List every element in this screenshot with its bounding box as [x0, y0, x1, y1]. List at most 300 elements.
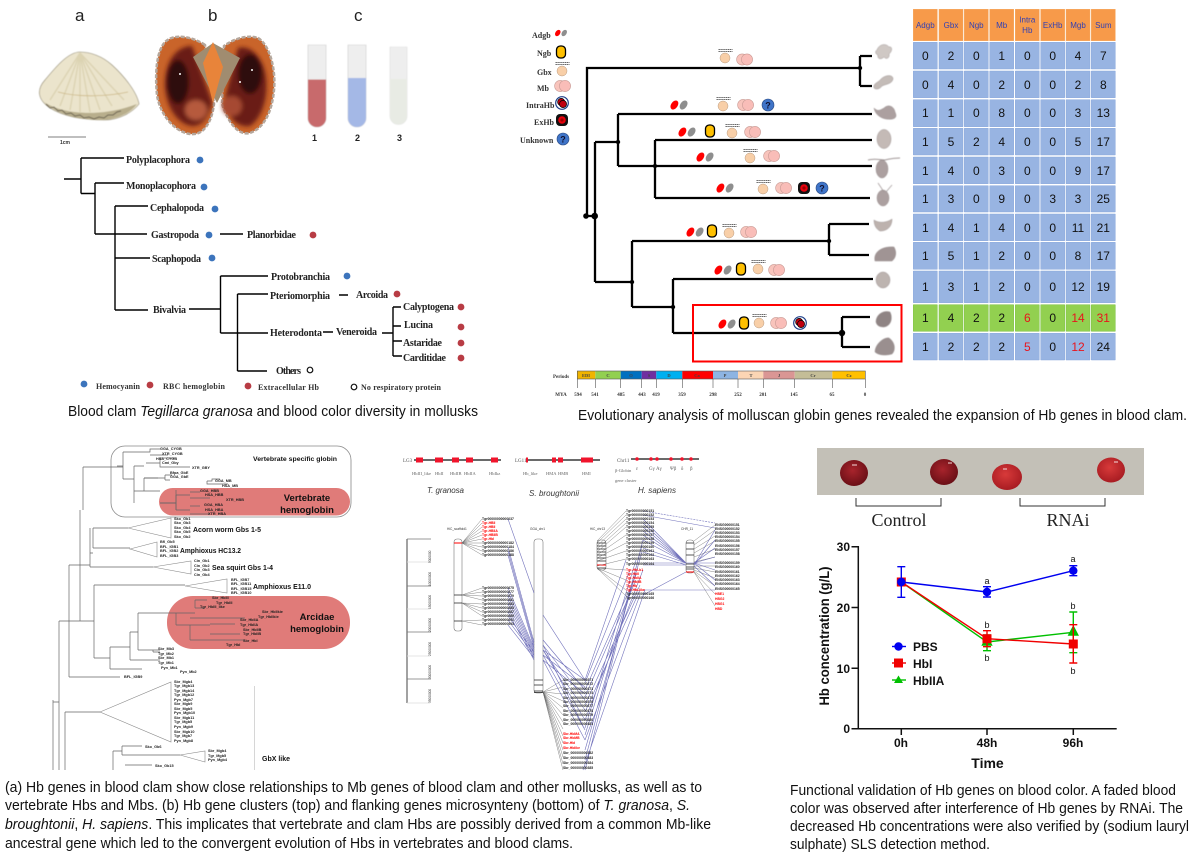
leaf labels: Cin_Gb1 [194, 559, 210, 563]
tube numbers [312, 133, 402, 143]
label: control: Control [871, 510, 927, 530]
gene count table: 0 [1024, 106, 1031, 120]
gene labels column 2: Sbr_000000000379 [563, 713, 593, 717]
gene labels column 2: Sbr_000000000373 [563, 687, 593, 691]
gene count table: 0 [973, 78, 980, 92]
gene count table: 31 [1097, 311, 1110, 325]
gene count table: 11 [1072, 221, 1085, 235]
significance letters: b [1070, 666, 1076, 676]
gene count table: 2 [998, 249, 1005, 263]
chart legend: HbIIA [913, 674, 945, 688]
gene labels column 2: Sbr_000000000383 [563, 756, 593, 760]
caption E: Functional validation of Hb genes on blood color. A faded blood [790, 782, 1176, 799]
gene count table: 2 [998, 311, 1005, 325]
leaf labels: Pyn_Mb1 [161, 666, 178, 670]
photo: tubes [308, 45, 407, 127]
species names: S. broughtonii [529, 489, 579, 498]
leaf labels: Tgr_HbIIB [243, 632, 261, 636]
geologic timeline: EDI [582, 373, 590, 378]
leaf labels: HSA_CYGB [156, 457, 177, 461]
leaf labels: Bfpa_GbE [170, 471, 189, 475]
gene count table: Adgb [916, 21, 935, 30]
leaf labels: GGA_HBA [204, 503, 223, 507]
leaf labels: BFL_IGB7 [231, 578, 249, 582]
leaf labels: GGA_GbE [170, 475, 189, 479]
panel: gene clusters and microsynteny: HiC_scaffold1 [447, 527, 467, 531]
gene labels column 1: Tgr-HbI [482, 537, 494, 541]
vertebrate specific box [111, 446, 351, 517]
gene count table: 0 [1024, 249, 1031, 263]
chart legend [892, 640, 945, 688]
gene count table: 4 [948, 221, 955, 235]
leaf labels: Cin_Gb3 [194, 568, 210, 572]
gene count table: 0 [973, 192, 980, 206]
leaf labels: BFL_IGB1 [160, 545, 178, 549]
gene labels column 3: Tgr000000000156 [626, 529, 654, 533]
species names [427, 486, 676, 498]
gene count table: 7 [1100, 49, 1107, 63]
gene count table: 2 [973, 135, 980, 149]
caption C [5, 779, 711, 852]
leaf labels: Sbr_Mb1 [158, 656, 174, 660]
gene legend icons [554, 29, 571, 145]
gene count table: 2 [1075, 78, 1082, 92]
gene legend labels: Mb [537, 84, 550, 93]
axis labels: 96h [1063, 736, 1083, 750]
gene count table: 2 [973, 340, 980, 354]
gene count table: 0 [1024, 221, 1031, 235]
gene count table: Mgb [1070, 21, 1086, 30]
gene labels column 2: Sbr-HbI [563, 741, 575, 745]
tree taxon labels: Protobranchia [271, 272, 330, 283]
leaf labels: Sbr_Mgb10 [174, 730, 194, 734]
geologic timeline: 594 [574, 393, 582, 398]
leaf labels: Sko_Gb15 [155, 764, 174, 768]
legend [96, 382, 442, 392]
caption E [790, 782, 1189, 853]
clade labels: Amphioxus HC13.2 [180, 548, 241, 555]
gene count table: 4 [948, 78, 955, 92]
H. sapiens gene cluster: Aγ [656, 467, 663, 472]
gene count table: 0 [1049, 135, 1056, 149]
gene labels column 2: Sbr_000000000385 [563, 766, 593, 770]
gene labels column 3: Tgr-HbIIA [626, 576, 642, 580]
tree taxon labels: Polyplacophora [126, 155, 190, 166]
gene labels column 4: ENSG00000159 [715, 561, 740, 565]
gene count table: Ngb [969, 21, 984, 30]
gene labels column 4: HBD [715, 607, 723, 611]
gene count table: 8 [1075, 249, 1082, 263]
panel: blood clam photos and mollusk tree [39, 6, 478, 420]
megabase scale: 15000000 [428, 595, 432, 609]
gene labels column 2: Sbr_000000000371 [563, 678, 593, 682]
photo: opened clam [156, 37, 274, 134]
leaf labels: HSA_HBB [205, 493, 224, 497]
gene count table: 0 [1024, 192, 1031, 206]
gene count table: 3 [948, 192, 955, 206]
gene count table: 8 [1100, 78, 1107, 92]
tree branches [53, 449, 245, 770]
scale bar [48, 137, 86, 146]
label a: a [75, 6, 85, 25]
chromosome to label fans [462, 511, 715, 770]
T. granosa gene cluster: HbIII_like [412, 471, 431, 476]
leaf labels: Sbr_Mgb4 [208, 749, 227, 753]
leaf labels: BFL_IGB3 [160, 554, 178, 558]
leaf labels: Sko_Gb1 [174, 517, 190, 521]
gene count table: 24 [1097, 340, 1110, 354]
gene count table: 14 [1071, 311, 1085, 325]
leaf labels: Pyn_Mgb10 [174, 711, 195, 715]
gene count table: 3 [948, 280, 955, 294]
tree taxon labels: Monoplacophora [126, 181, 196, 192]
geologic timeline: J [778, 373, 781, 378]
leaf labels: Sbr_Mgb4 [174, 680, 193, 684]
caption C: vertebrate Hbs and Mbs. (b) Hb gene clusters (top) and flanking genes microsynteny (bottom) of T. granosa, S. [5, 797, 690, 814]
tree taxon labels: Heterodonta [270, 328, 322, 339]
legend: No respiratory protein [361, 383, 442, 392]
tree taxon labels: Scaphopoda [152, 254, 201, 265]
gene count table: 13 [1097, 106, 1110, 120]
gene count table: 1 [922, 340, 929, 354]
geologic timeline: 359 [678, 393, 686, 398]
leaf labels: Sko_Gb2 [174, 535, 190, 539]
leaf labels: XTR_HBA [208, 512, 226, 516]
caption E: sulphate) SLS detection method. [790, 836, 990, 853]
geologic timeline: 485 [617, 393, 625, 398]
megabase scale: 10000000 [428, 572, 432, 586]
leaf labels: Tgr_Mb2 [158, 652, 174, 656]
gene labels column 4: ENSG00000154 [715, 535, 740, 539]
S. broughtonii gene cluster: Hb_like [523, 471, 538, 476]
tree taxon labels: Astaridae [403, 338, 443, 349]
gene count table: 1 [922, 249, 929, 263]
gene count table: Hb [1022, 26, 1033, 35]
gene count table: 0 [973, 49, 980, 63]
gene labels column 4: ENSG00000162 [715, 574, 740, 578]
gene labels column 2: Sbr-HbMB [563, 736, 580, 740]
clade labels: Sea squirt Gbs 1-4 [212, 565, 273, 572]
gene count table: 5 [948, 249, 955, 263]
species names: T. granosa [427, 486, 465, 495]
panel: RNAi validation [790, 448, 1189, 853]
chart legend: HbI [913, 657, 932, 671]
gene labels column 4: ENSG00000165 [715, 587, 740, 591]
leaf labels: Pyn_Mgb9 [174, 725, 193, 729]
tree taxon labels: Carditidae [403, 353, 447, 364]
caption C: (a) Hb genes in blood clam show close relationships to Mb genes of blood clam and other mollusks, as well as to [5, 779, 702, 796]
tree taxon labels: Cephalopoda [150, 203, 204, 214]
gene legend labels [520, 31, 555, 145]
tree taxon labels [126, 155, 454, 377]
gene count table: 2 [973, 311, 980, 325]
gene count table: 2 [948, 340, 955, 354]
leaf labels: Sbr_Mgb5 [174, 707, 192, 711]
gene labels column 3: Tgr000000000165 [626, 592, 654, 596]
gene count table: 1 [922, 135, 929, 149]
gene labels column 3: Tgr000000000166 [626, 596, 654, 600]
gene labels column 2: Sbr_000000000384 [563, 761, 593, 765]
gene labels column 1: Tgr00000000000186 [482, 549, 514, 553]
axes [852, 547, 1117, 735]
gene count table: 0 [1024, 280, 1031, 294]
leaf labels: GGA_HBB [200, 489, 219, 493]
gene labels column 4: HBG1 [715, 602, 725, 606]
H. sapiens gene cluster: Chr11 [617, 459, 630, 464]
gene count table: 17 [1097, 135, 1110, 149]
S. broughtonii gene cluster [515, 458, 600, 476]
axis labels: 30 [837, 540, 850, 554]
gene legend labels: Gbx [537, 68, 552, 77]
gene count table: 1 [973, 221, 980, 235]
gene labels column 4: ENSG00000153 [715, 531, 740, 535]
megabase scale: 30000000 [428, 665, 432, 679]
leaf labels [124, 447, 283, 768]
leaf labels: GGA_CYGB [160, 447, 182, 451]
gene count table: 0 [922, 78, 929, 92]
axis labels: Time [971, 755, 1004, 771]
leaf labels: Pyn_Mgb4 [208, 758, 228, 762]
significance letters: a [1070, 554, 1076, 564]
leaf labels: BFL_IGB9 [124, 675, 142, 679]
leaf labels: XTR_HBB [226, 498, 244, 502]
gene count table: 0 [1049, 311, 1056, 325]
gene labels column 3: Tgr000000000153 [626, 517, 654, 521]
gene labels column 2: Sbr-HbMA [563, 732, 580, 736]
gene labels column 3: Tgr-Hb [626, 584, 637, 588]
gene labels column 4 [715, 523, 740, 611]
gene count table: 0 [1049, 249, 1056, 263]
significance letters [984, 554, 1076, 676]
scale bar: 1cm [60, 140, 71, 146]
gene labels column 3: Tgr-HbIIB [626, 580, 642, 584]
gene count table: Mb [996, 21, 1008, 30]
leaf labels: Tgr_HbIII_like [200, 605, 225, 609]
tube numbers: 1 [312, 133, 317, 143]
H. sapiens gene cluster [615, 457, 699, 483]
gene count table: 2 [998, 78, 1005, 92]
gene count table: 1 [922, 106, 929, 120]
gene count table: 2 [998, 280, 1005, 294]
gene labels column 4: ENSG00000161 [715, 570, 740, 574]
gene labels column 1: Tgr00000000000675 [482, 586, 514, 590]
gene count table: 6 [1024, 311, 1031, 325]
series: HbI [897, 578, 1078, 663]
clade labels: Vertebrate [284, 493, 330, 504]
megabase scale: 5000000 [428, 550, 432, 563]
gene labels column 1: Tgr00000000000182 [482, 541, 514, 545]
megabase scale: 20000000 [428, 618, 432, 632]
leaf labels: Sbr_HbIII [212, 596, 229, 600]
gene labels column 3: Tgr000000000162 [626, 553, 654, 557]
chromosome bars [454, 539, 694, 693]
gene labels column 1: Tgr00000000000679 [482, 594, 514, 598]
gene icons on branches [669, 50, 828, 330]
geologic timeline: 201 [759, 393, 767, 398]
megabase scale: 25000000 [428, 642, 432, 656]
T. granosa gene cluster: LG3 [403, 459, 413, 464]
species names: H. sapiens [638, 486, 676, 495]
gene labels column 1: Tgr-HBIIB [482, 533, 498, 537]
gene count table: 0 [1049, 340, 1056, 354]
leaf labels: Tgr_Mgb14 [174, 689, 195, 693]
tree taxon labels: Lucina [404, 320, 433, 331]
geologic timeline: 443 [638, 393, 646, 398]
geologic timeline: C [606, 373, 610, 378]
gene labels column 3: Tgr000000000157 [626, 533, 654, 537]
clade labels: Arcidae [300, 612, 334, 623]
gene count table: 0 [922, 49, 929, 63]
gene labels column 2: Sbr_000000000377 [563, 704, 593, 708]
leaf labels: Pyn_Mgb7 [174, 698, 193, 702]
gene count table: 1 [922, 280, 929, 294]
clade labels: Acorn worm Gbs 1-5 [193, 527, 261, 534]
leaf labels: XTR_GBY [192, 466, 210, 470]
gene count table: 3 [1075, 192, 1082, 206]
gene count table: 9 [998, 192, 1005, 206]
gene labels column 4: ENSG00000152 [715, 527, 740, 531]
geologic timeline: 65 [830, 393, 835, 398]
gene labels column 2: Sbr_000000000382 [563, 751, 593, 755]
gene labels column 1: Tgr00000000000685 [482, 606, 514, 610]
T. granosa gene cluster: HbIIB [450, 471, 462, 476]
leaf labels: Sbr_HbIIkie [262, 610, 283, 614]
T. granosa gene cluster: HbII [435, 471, 444, 476]
geologic timeline: P [724, 373, 727, 378]
axis labels: 0 [843, 722, 850, 736]
megabase scale [407, 539, 432, 703]
photo: blood samples [817, 448, 1144, 495]
gene labels column 2 [563, 678, 593, 770]
gene count table: 1 [922, 311, 929, 325]
leaf labels: Tgr_HbI [226, 643, 240, 647]
gene labels column 1: Tgr-HBIIA [482, 529, 498, 533]
gene labels column 1: Tgr00000000000681 [482, 598, 514, 602]
S. broughtonii gene cluster: HMI [582, 471, 591, 476]
photo: clam shell [39, 52, 139, 120]
gene labels column 4: HBE1 [715, 592, 724, 596]
gene labels column 1: Tgr00000000000188 [482, 553, 514, 557]
leaf labels: Tgr_Mgb7 [174, 734, 192, 738]
gene count table: 0 [973, 164, 980, 178]
leaf labels: BFL_IGB2 [160, 549, 178, 553]
gene labels column 2: Sbr_000000000381 [563, 722, 593, 726]
gene labels column 3: Tgr-HbI-like [626, 588, 645, 592]
gene count table: 5 [1024, 340, 1031, 354]
leaf labels: Sko_Gb6 [145, 745, 161, 749]
clade labels: hemoglobin [290, 624, 344, 635]
tree taxon labels: Arcoida [356, 290, 388, 301]
gene legend labels: Unknown [520, 136, 554, 145]
gene labels column 2: Sbr_000000000378 [563, 709, 593, 713]
leaf labels: HSA_HBA [205, 508, 224, 512]
collapsed clades [100, 518, 227, 762]
gene labels column 1: Tgr00000000000689 [482, 614, 514, 618]
arcidae hemoglobin highlight [167, 596, 350, 649]
gene labels column 1: Tgr00000000000693 [482, 622, 514, 626]
gene count table [913, 9, 1115, 360]
gene count table: 12 [1071, 280, 1085, 294]
tube numbers: 2 [355, 133, 360, 143]
H. sapiens gene cluster: Ψβ [670, 467, 677, 472]
leaf labels: Tgr_HbIII [216, 601, 232, 605]
H. sapiens gene cluster: δ [681, 467, 684, 472]
geologic timeline: 145 [790, 393, 798, 398]
gene count table: 4 [998, 221, 1005, 235]
leaf labels: Sbr_HbI [243, 639, 258, 643]
gene count table: 3 [1075, 106, 1082, 120]
panel: gene clusters and microsynteny [403, 457, 740, 770]
geologic timeline [553, 371, 867, 398]
leaf labels: Sko_Gb4 [174, 526, 191, 530]
synteny links [508, 511, 715, 770]
caption A: Blood clam Tegillarca granosa and blood color diversity in mollusks [68, 403, 478, 420]
gene labels column 1: Tgr-HBII [482, 521, 495, 525]
H. sapiens gene cluster: β [690, 467, 693, 472]
leaf labels: BFL_IGB11 [231, 582, 251, 586]
gene count table: 19 [1097, 280, 1110, 294]
gene labels column 4: ENSG00000160 [715, 565, 740, 569]
leaf labels: Sbr_Mb3 [158, 647, 174, 651]
gene count table: 0 [1049, 78, 1056, 92]
gene count table: 0 [1024, 78, 1031, 92]
leaf labels: Pyn_Mgb8 [174, 739, 193, 743]
clade labels [180, 456, 344, 763]
gene labels column 2: Sbr-Hblike [563, 746, 580, 750]
leaf labels: Sbr_Mgb11 [174, 716, 194, 720]
species silhouettes [868, 45, 900, 355]
S. broughtonii gene cluster: LG11 [515, 459, 527, 464]
tree taxon labels: Planorbidae [247, 230, 297, 241]
mollusk phylogeny tree [64, 158, 402, 371]
gene labels column 1: Tgr00000000000687 [482, 610, 514, 614]
T. granosa gene cluster [403, 458, 501, 476]
leaf labels: HSA_MB [222, 484, 238, 488]
leaf labels: Cin_Gb4 [194, 573, 211, 577]
gene count table: 0 [973, 106, 980, 120]
leaf labels: Pyn_Mb2 [180, 670, 197, 674]
gene count table: Intra [1019, 16, 1036, 24]
axis labels: 48h [977, 736, 997, 750]
leaf labels: Sbr_HbIIA [240, 618, 259, 622]
leaf labels: BFL_IGB10 [231, 591, 251, 595]
gene count table: 0 [1049, 280, 1056, 294]
tube numbers: 3 [397, 133, 402, 143]
tree taxon labels: Pteriomorphia [270, 291, 330, 302]
gene labels column 2: Sbr_000000000374 [563, 691, 593, 695]
gene count table: 1 [922, 221, 929, 235]
axis labels: 10 [837, 662, 850, 676]
leaf labels: Cmi_Gby [162, 461, 180, 465]
gene labels column 3: Tgr000000000161 [626, 549, 654, 553]
gene count table: 5 [948, 135, 955, 149]
geologic timeline: 419 [652, 393, 660, 398]
leaf labels: Tgr_Mb1 [158, 661, 174, 665]
gene count table: 3 [1049, 192, 1056, 206]
geologic timeline: MYA [555, 393, 567, 398]
bracket: RNAi [1020, 498, 1105, 506]
leaf labels: Tgr_Mgb5 [208, 754, 226, 758]
significance letters: b [984, 653, 990, 663]
gene count table: 0 [1049, 49, 1056, 63]
gene labels column 4: HBG2 [715, 597, 725, 601]
tree taxon labels: Veneroida [336, 327, 377, 338]
gene count table: 2 [948, 49, 955, 63]
series: PBS [897, 566, 1078, 597]
panel: gene clusters and microsynteny: GGA_chr1 [530, 527, 545, 531]
gene count table: 1 [948, 106, 955, 120]
gene labels column 3: Tgr000000000155 [626, 525, 654, 529]
